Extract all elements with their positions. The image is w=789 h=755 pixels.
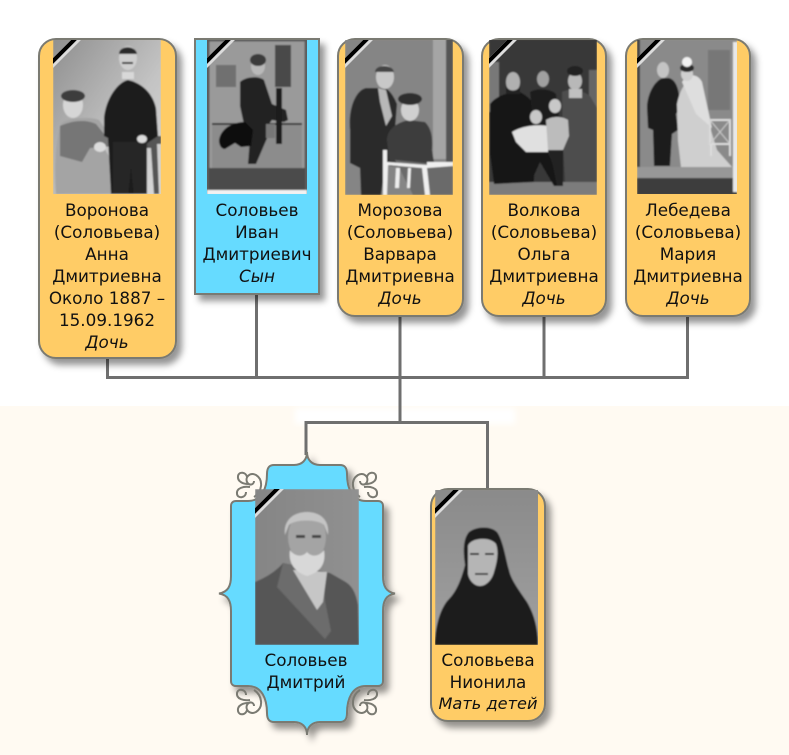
mourning ribbon <box>637 40 665 68</box>
card: Voronova Anna <box>39 36 176 358</box>
mourning ribbon <box>435 490 463 518</box>
card: Lebedeva Maria <box>626 36 750 316</box>
text: Nionila: Соловьева <box>441 650 535 670</box>
text: Maria: Дмитриевна <box>633 266 743 286</box>
text: Maria: Лебедева <box>645 200 731 220</box>
text: Anna: (Соловьева) <box>54 222 160 242</box>
photo: bearded man <box>252 486 359 645</box>
card: Morozova Varvara <box>338 36 463 316</box>
text: Maria: Дочь <box>665 288 710 308</box>
text: Varvara: Дочь <box>377 288 422 308</box>
card: Solovyov Ivan <box>195 36 319 294</box>
mourning ribbon <box>252 486 282 516</box>
text: Olga: Дмитриевна <box>489 266 599 286</box>
card: Solovyova Nionila <box>431 486 545 721</box>
mourning ribbon <box>345 40 373 68</box>
text: Maria: Мария <box>660 244 716 264</box>
card: Solovyov Dmitry ornate frame <box>219 452 395 735</box>
text: Varvara: Варвара <box>363 244 437 264</box>
text: Anna: Дочь <box>84 332 129 352</box>
text: Ivan: Соловьев <box>216 200 298 220</box>
ornaments <box>237 473 377 714</box>
mourning ribbon <box>489 40 517 68</box>
photo: woman in dark headscarf <box>432 486 539 645</box>
text: Varvara: Морозова <box>357 200 443 220</box>
text: Anna <box>49 200 165 352</box>
text: Dmitry: Соловьев <box>265 650 347 670</box>
text: Anna: Дмитриевна <box>52 266 162 286</box>
text: Olga: (Соловьева) <box>491 222 597 242</box>
text: Nionila <box>438 650 538 713</box>
card: Volkova Olga <box>482 36 606 316</box>
mourning ribbon <box>53 40 81 68</box>
text: Varvara: Дмитриевна <box>345 266 455 286</box>
text: Olga <box>489 200 599 308</box>
text: Anna: Анна <box>85 244 129 264</box>
text: Olga: Ольга <box>518 244 570 264</box>
text: Nionila: Мать детей <box>438 694 538 713</box>
text: Anna: 15.09.1962 <box>59 310 155 330</box>
text: Dmitry: Дмитрий <box>267 672 345 692</box>
text: Maria: (Соловьева) <box>635 222 741 242</box>
text: Olga: Дочь <box>521 288 566 308</box>
text: Maria <box>633 200 743 308</box>
photo: wedding couple <box>634 36 738 195</box>
text: Ivan: Иван <box>235 222 279 242</box>
text: Olga: Волкова <box>507 200 581 220</box>
text: Dmitry <box>265 650 347 692</box>
photo: boy with dog <box>204 36 307 195</box>
text: Anna: Воронова <box>65 200 149 220</box>
text: Ivan <box>202 200 312 286</box>
text: Anna: Около 1887 – <box>49 288 165 308</box>
photo: couple, woman seated and man standing <box>50 36 161 195</box>
text: Nionila: Нионила <box>450 672 526 692</box>
text: Varvara <box>345 200 455 308</box>
connector lines <box>108 290 688 492</box>
photo: couple with white chair <box>342 36 453 195</box>
mourning ribbon <box>207 40 235 68</box>
text: Ivan: Сын <box>239 266 275 286</box>
lower background band <box>0 406 789 755</box>
photo: family group <box>486 36 597 195</box>
text: Ivan: Дмитриевич <box>202 244 312 264</box>
text: Varvara: (Соловьева) <box>347 222 453 242</box>
